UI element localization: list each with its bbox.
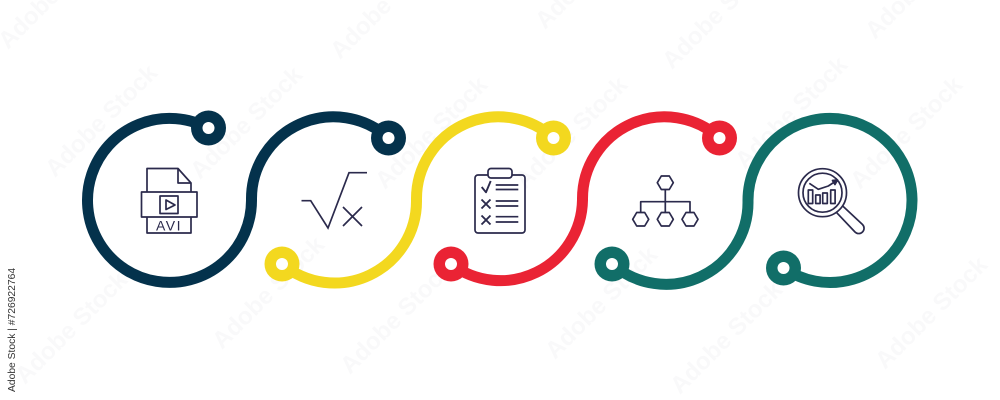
curve: teal <box>594 118 912 286</box>
watermark pattern: Adobe Stock <box>845 71 968 194</box>
stock id label: Adobe Stock | #726922764 <box>7 268 18 392</box>
curve: red <box>434 117 737 282</box>
watermark pattern: Adobe Stock <box>870 251 993 374</box>
icon: clipboard checklist <box>475 168 525 233</box>
icon: square root of x <box>302 173 367 228</box>
watermark pattern: Adobe Stock <box>185 61 308 184</box>
watermark pattern: Adobe Stock <box>10 266 133 389</box>
icon: AVI file <box>142 168 197 234</box>
watermark pattern: Adobe Stock <box>370 71 493 194</box>
watermark pattern: Adobe Stock <box>335 256 458 379</box>
curve: yellow <box>264 117 571 283</box>
watermark pattern: Adobe Stock <box>40 59 163 182</box>
icon: hexagon hierarchy <box>633 176 698 226</box>
watermark pattern: Adobe Stock <box>207 231 330 354</box>
watermark pattern: Adobe Stock <box>510 71 633 194</box>
watermark pattern: Adobe Stock <box>730 51 853 174</box>
watermark pattern: Adobe Stock <box>540 241 663 364</box>
curve: navy <box>88 110 406 282</box>
watermark pattern: Adobe Stock <box>665 276 788 399</box>
icon: magnifier with chart <box>798 169 864 234</box>
icon: AVI file: AVI <box>156 218 182 234</box>
